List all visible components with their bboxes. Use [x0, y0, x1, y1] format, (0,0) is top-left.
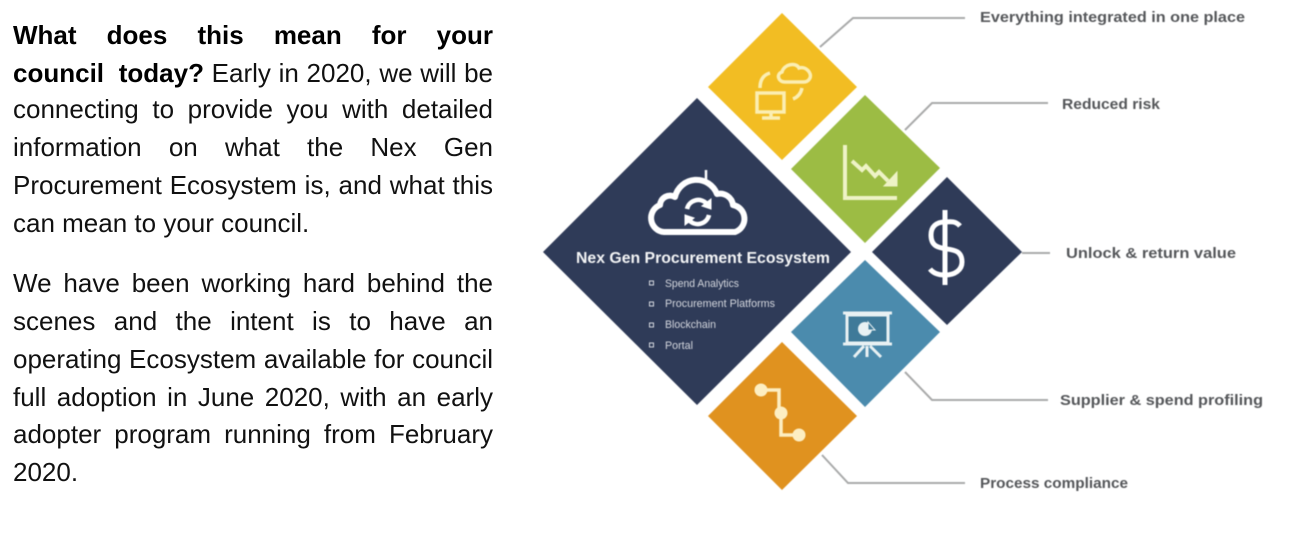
- panel: orange diamond: [708, 342, 857, 490]
- panel: yellow diamond: [708, 13, 857, 160]
- labels: benefits: Supplier & spend profiling: [1060, 392, 1263, 409]
- list: ecosystem components: Spend Analytics: [665, 278, 739, 290]
- icon: cloud and monitor: [757, 65, 810, 118]
- list: ecosystem components: [650, 278, 775, 352]
- icon: presentation board with pie chart: [843, 313, 892, 357]
- labels: benefits: Everything integrated in one place: [980, 9, 1245, 26]
- text block: first paragraph: What does this mean for your: [13, 20, 493, 50]
- icon: declining chart: [845, 145, 897, 198]
- text block: first paragraph: can mean to your council.: [13, 208, 309, 238]
- labels: benefits: Process compliance: [980, 475, 1128, 492]
- text block: first paragraph: connecting to provide you with detailed: [13, 94, 493, 124]
- labels: benefits: Reduced risk: [1062, 96, 1161, 113]
- text block: second paragraph: adopter program running from February: [13, 419, 493, 449]
- labels: benefits: Unlock & return value: [1066, 245, 1236, 262]
- labels: benefits: [980, 9, 1263, 492]
- text block: second paragraph: We have been working hard behind the: [13, 268, 493, 298]
- panel: navy dollar diamond: [872, 177, 1022, 325]
- text block: second paragraph: scenes and the intent is to have an: [13, 306, 493, 336]
- list: ecosystem components: Portal: [665, 340, 693, 352]
- text block: second paragraph: [13, 268, 493, 487]
- icon: cloud with sync arrows: [651, 170, 744, 232]
- leader lines: [820, 18, 1050, 483]
- text block: first paragraph: [13, 20, 493, 238]
- list: ecosystem components: Procurement Platforms: [665, 298, 775, 310]
- heading: Nex Gen Procurement Ecosystem: Nex Gen Procurement Ecosystem: [576, 250, 830, 267]
- text block: second paragraph: full adoption in June 2020, with an early: [13, 382, 493, 412]
- panel: blue diamond: [791, 260, 940, 407]
- list: ecosystem components: Blockchain: [665, 319, 716, 331]
- icon: process path: [754, 384, 806, 442]
- text block: second paragraph: 2020.: [13, 457, 78, 487]
- panel: main navy diamond: [543, 98, 851, 405]
- icon: dollar sign: [930, 210, 962, 285]
- text block: first paragraph: information on what the Nex Gen: [13, 132, 493, 162]
- text block: first paragraph: council today? Early in 2020, we will be: [13, 58, 493, 88]
- text block: first paragraph: Procurement Ecosystem is, and what this: [13, 170, 493, 200]
- text block: second paragraph: operating Ecosystem available for council: [13, 344, 493, 374]
- panel: green diamond: [791, 95, 940, 243]
